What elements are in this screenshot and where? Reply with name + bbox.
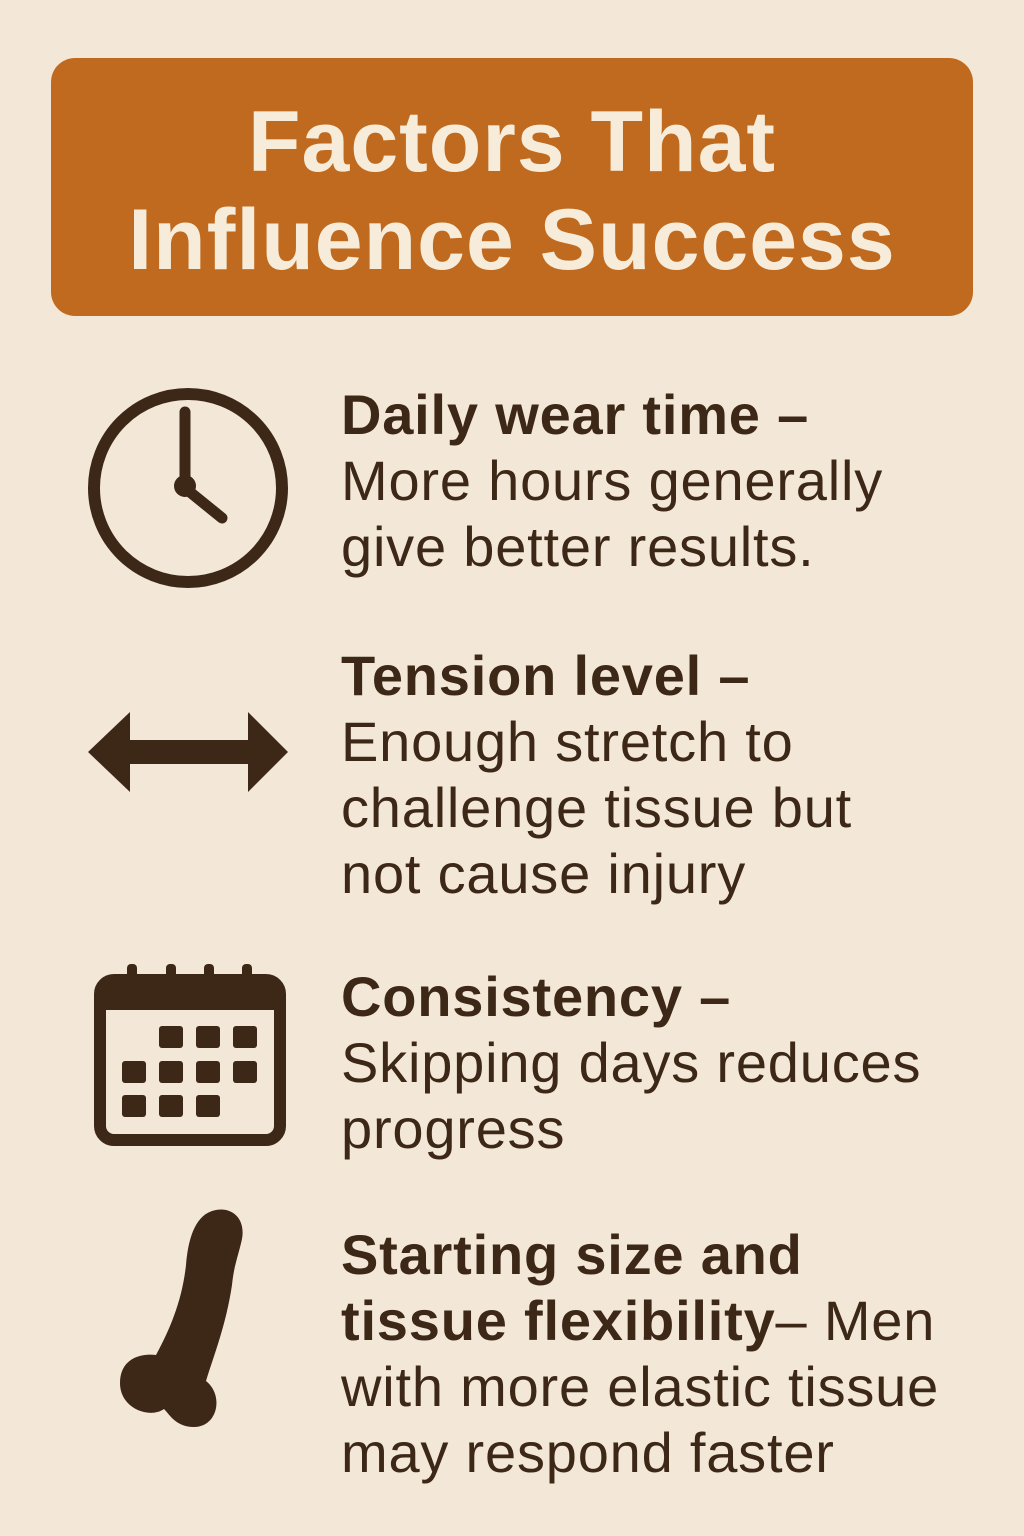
- title banner: Factors That: [248, 94, 776, 190]
- text: tension level: [341, 644, 852, 905]
- text: starting size: may respond faster: [341, 1421, 835, 1484]
- icon: calendar: [94, 964, 286, 1146]
- text: daily wear time: [341, 383, 883, 578]
- text: starting size: tissue flexibility– Men: [341, 1289, 935, 1352]
- icon: anatomical shape: [120, 1210, 243, 1427]
- icon: clock: [88, 388, 288, 588]
- text: tension level: Enough stretch to: [341, 710, 794, 773]
- icon: double arrow: [88, 712, 288, 792]
- text: daily wear time: Daily wear time –: [341, 383, 809, 446]
- text: starting size: Starting size and: [341, 1223, 803, 1286]
- text: daily wear time: give better results.: [341, 515, 815, 578]
- text: tension level: Tension level –: [341, 644, 750, 707]
- text: starting size: with more elastic tissue: [341, 1355, 939, 1418]
- text: consistency: progress: [341, 1097, 565, 1160]
- title banner: Influence Success: [128, 192, 896, 288]
- title banner: [51, 58, 973, 316]
- text: consistency: Consistency –: [341, 965, 731, 1028]
- text: tension level: not cause injury: [341, 842, 746, 905]
- text: consistency: [341, 965, 921, 1160]
- text: daily wear time: More hours generally: [341, 449, 883, 512]
- text: starting size: [340, 1223, 939, 1484]
- text: tension level: challenge tissue but: [341, 776, 852, 839]
- text: consistency: Skipping days reduces: [341, 1031, 921, 1094]
